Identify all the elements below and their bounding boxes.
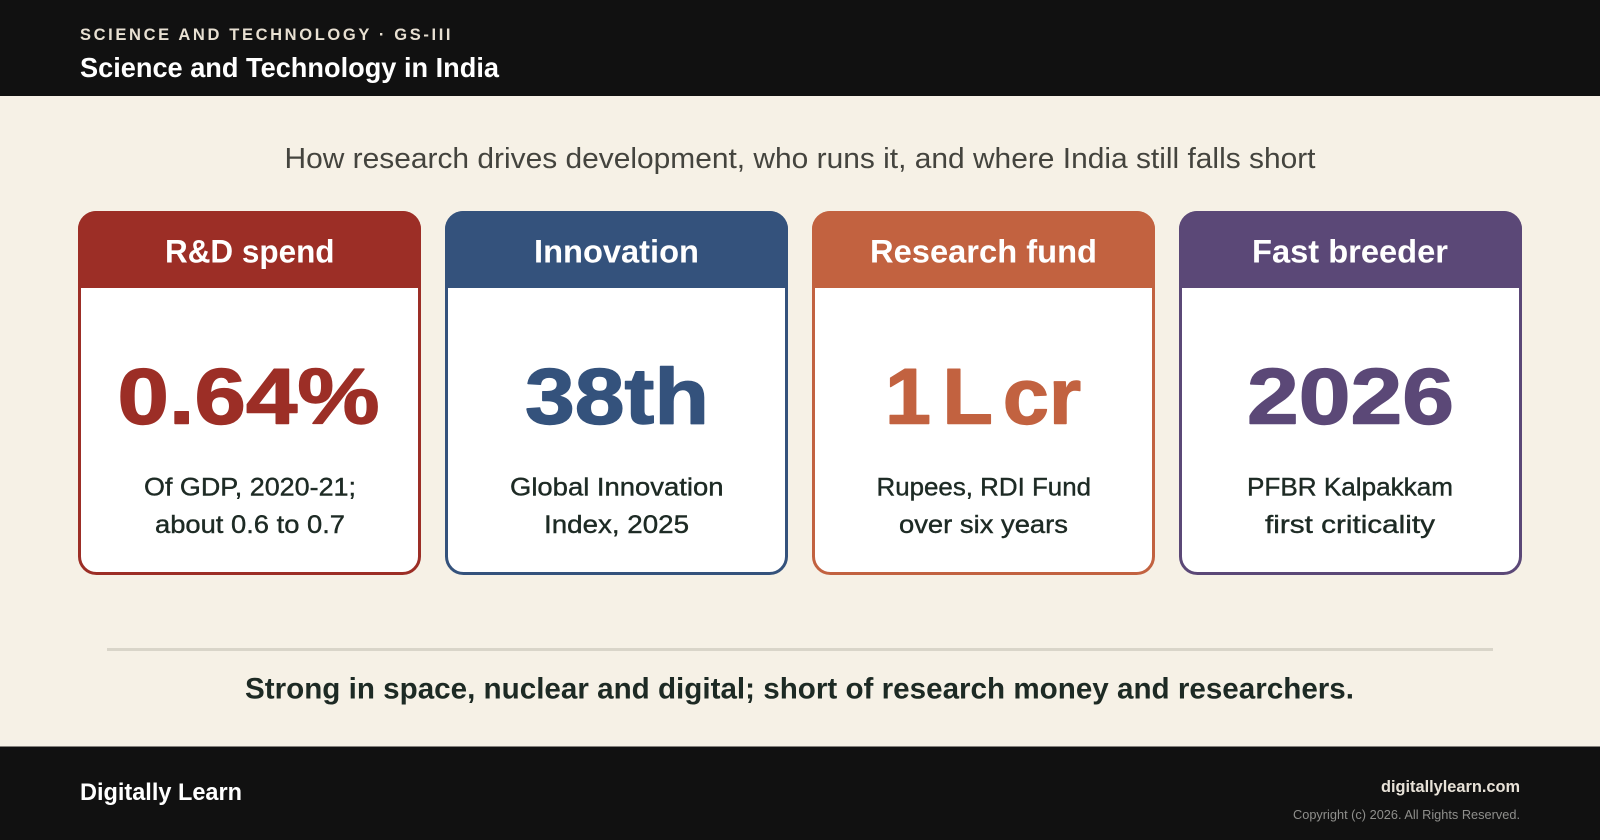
panel: Fast breeder	[1179, 211, 1522, 574]
description	[144, 474, 356, 539]
panel: Research fund	[812, 211, 1155, 574]
big number: 1 L cr	[885, 352, 1081, 440]
website: digitallylearn.com	[1381, 777, 1520, 796]
big number: 2026	[1247, 352, 1454, 440]
description: first criticality	[1265, 511, 1436, 539]
description: about 0.6 to 0.7	[155, 511, 345, 539]
card heading: Innovation	[534, 234, 699, 270]
description: PFBR Kalpakkam	[1247, 474, 1453, 502]
card heading: R&D spend	[165, 234, 334, 270]
card heading: Research fund	[870, 234, 1097, 270]
description: Rupees, RDI Fund	[876, 474, 1091, 502]
description: over six years	[899, 511, 1068, 539]
description: Of GDP, 2020-21;	[144, 474, 356, 502]
card heading: Fast breeder	[1252, 234, 1448, 270]
description	[1247, 474, 1453, 539]
panel: Innovation	[445, 211, 788, 574]
big number: 0.64%	[118, 352, 380, 440]
description	[876, 474, 1091, 539]
copyright: Copyright (c) 2026. All Rights Reserved.	[1293, 807, 1520, 822]
conclusion: Strong in space, nuclear and digital; short of research money and researchers.	[245, 672, 1354, 706]
description	[510, 474, 724, 539]
description: Global Innovation	[510, 474, 724, 502]
title: Science and Technology in India	[80, 52, 499, 83]
footer band	[0, 746, 1600, 840]
brand: Digitally Learn	[80, 779, 242, 806]
big number: 38th	[525, 352, 709, 440]
kicker: SCIENCE AND TECHNOLOGY · GS-III	[80, 26, 450, 44]
description: Index, 2025	[544, 511, 689, 539]
header band	[0, 0, 1600, 96]
panel: R&D spend	[78, 211, 421, 574]
subtitle: How research drives development, who runs it, and where India still falls short	[284, 143, 1316, 175]
